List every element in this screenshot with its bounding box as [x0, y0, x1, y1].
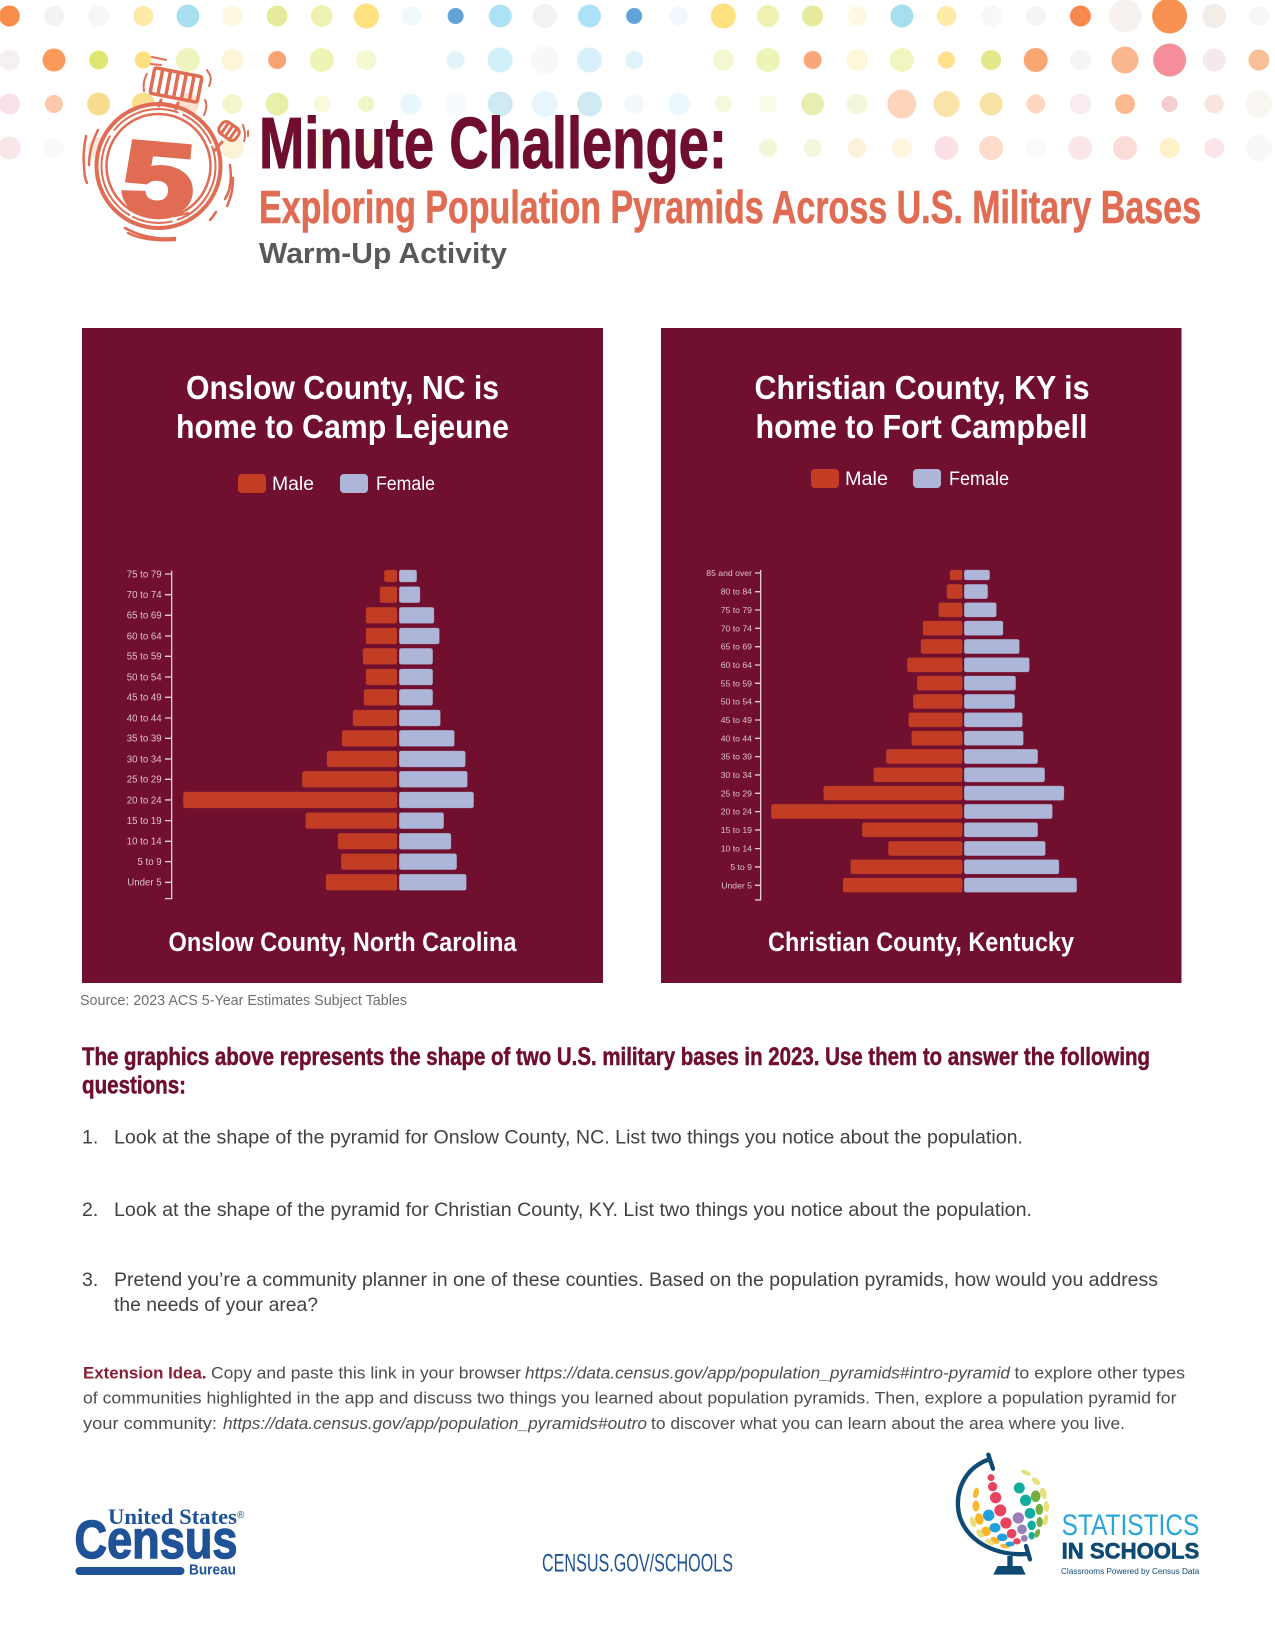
- icon: stopwatch with number 5: [84, 57, 248, 240]
- age labels: 30 to 34: [127, 754, 162, 765]
- chart: Onslow population pyramid: [127, 569, 474, 899]
- age labels: 75 to 79: [721, 605, 752, 615]
- age labels: 65 to 69: [721, 642, 752, 652]
- question 2: Look at the shape of the pyramid for Christian County, KY. List two things you notice about the population.: [114, 1199, 1032, 1221]
- panel heading: Fort Campbell: home to Fort Campbell: [756, 408, 1088, 445]
- age labels: 50 to 54: [127, 672, 162, 683]
- age labels: 5 to 9: [137, 857, 162, 868]
- warm-up heading: Warm-Up Activity: [259, 238, 507, 270]
- age labels: 85 and over: [706, 568, 752, 578]
- header dot pattern: [0, 0, 1272, 162]
- legend: Christian: [811, 469, 1009, 490]
- age labels: 60 to 64: [127, 631, 162, 642]
- female bars: [399, 570, 474, 890]
- question 3: [82, 1269, 1158, 1316]
- age labels: 60 to 64: [721, 660, 752, 670]
- age labels: 65 to 69: [127, 611, 162, 622]
- age labels: 30 to 34: [721, 770, 752, 780]
- question 3: the needs of your area?: [114, 1294, 318, 1316]
- age labels: 45 to 49: [127, 693, 162, 704]
- age labels: 25 to 29: [721, 788, 752, 798]
- age labels: 70 to 74: [721, 623, 752, 633]
- legend: Christian: Female: [949, 469, 1009, 490]
- extension idea: https://data.census.gov/app/population_pyramids#outro: [223, 1414, 647, 1433]
- panel heading: Fort Campbell: Christian County, KY is: [754, 369, 1090, 406]
- age labels: 40 to 44: [127, 713, 162, 724]
- age labels: 10 to 14: [127, 837, 162, 848]
- extension idea: your community:: [83, 1414, 217, 1433]
- age labels: 70 to 74: [127, 590, 162, 601]
- age labels: 15 to 19: [127, 816, 162, 827]
- website link: CENSUS.GOV/SCHOOLS: [542, 1550, 733, 1578]
- legend: Onslow: Male: [272, 474, 314, 495]
- extension idea: of communities highlighted in the app and discuss two things you learned about population pyramids. Then, explore a population pyramid for: [83, 1388, 1177, 1408]
- male bars: [183, 570, 397, 890]
- logo wordmark: IN SCHOOLS: [1062, 1538, 1199, 1563]
- age labels: 40 to 44: [721, 733, 752, 743]
- panel heading: Camp Lejeune: Onslow County, NC is: [186, 369, 499, 406]
- question 2: 2.: [82, 1199, 98, 1221]
- title: Minute Challenge:: [259, 104, 727, 184]
- question 1: Look at the shape of the pyramid for Onslow County, NC. List two things you notice about the population.: [114, 1126, 1023, 1148]
- age labels: Under 5: [127, 878, 162, 889]
- panel heading: Camp Lejeune: home to Camp Lejeune: [176, 408, 509, 445]
- legend: Onslow: Female: [376, 474, 435, 495]
- panel heading: Camp Lejeune: [176, 369, 509, 445]
- age labels: 35 to 39: [721, 752, 752, 762]
- question 3: 3.: [82, 1269, 98, 1291]
- extension idea: Copy and paste this link in your browser: [211, 1364, 521, 1382]
- extension idea: https://data.census.gov/app/population_pyramids#intro-pyramid: [525, 1364, 1011, 1382]
- age labels: 25 to 29: [127, 775, 162, 786]
- questions heading: questions:: [82, 1072, 186, 1100]
- age labels: 10 to 14: [721, 844, 752, 854]
- extension idea: Extension Idea.: [83, 1364, 206, 1382]
- logo: Statistics in Schools: [958, 1455, 1200, 1576]
- age labels: 55 to 59: [721, 678, 752, 688]
- extension idea: [83, 1364, 1185, 1433]
- age labels: 5 to 9: [730, 862, 752, 872]
- age labels: 20 to 24: [127, 795, 162, 806]
- age labels: 50 to 54: [721, 697, 752, 707]
- source note: Source: 2023 ACS 5-Year Estimates Subject Tables: [80, 992, 407, 1009]
- panel heading: Fort Campbell: [754, 369, 1090, 445]
- panel: Christian County: [661, 328, 1182, 983]
- logo wordmark: [1061, 1509, 1200, 1576]
- logo: United States Census Bureau: ®: [237, 1510, 245, 1521]
- logo: United States Census Bureau: Bureau: [189, 1562, 236, 1578]
- extension idea: to discover what you can learn about the area where you live.: [651, 1414, 1125, 1433]
- chart: Christian population pyramid: [706, 568, 1077, 900]
- male bars: [771, 570, 962, 892]
- questions heading: [82, 1043, 1150, 1100]
- panel: Onslow County: [82, 328, 603, 983]
- chart caption: Onslow: Onslow County, North Carolina: [168, 927, 517, 957]
- logo: United States Census Bureau: United States: [108, 1504, 237, 1529]
- logo wordmark: STATISTICS: [1062, 1509, 1199, 1542]
- number 5: 5: [117, 120, 199, 238]
- age labels: 20 to 24: [721, 807, 752, 817]
- age labels: 80 to 84: [721, 587, 752, 597]
- extension idea: to explore other types: [1014, 1364, 1185, 1382]
- legend: Onslow: [238, 474, 435, 495]
- age labels: Under 5: [721, 880, 752, 890]
- legend: Christian: Male: [845, 469, 888, 490]
- age labels: 75 to 79: [127, 569, 162, 580]
- logo: United States Census Bureau: Census: [74, 1510, 238, 1570]
- female bars: [964, 570, 1077, 892]
- age labels: 15 to 19: [721, 825, 752, 835]
- age labels: [127, 569, 162, 889]
- age labels: 35 to 39: [127, 734, 162, 745]
- question 3: Pretend you’re a community planner in one of these counties. Based on the population pyramids, how would you address: [114, 1269, 1158, 1291]
- icon: globe: [958, 1455, 1049, 1575]
- chart caption: Christian: Christian County, Kentucky: [768, 927, 1074, 957]
- age labels: 45 to 49: [721, 715, 752, 725]
- question 1: 1.: [82, 1126, 98, 1148]
- age labels: [706, 568, 752, 890]
- logo wordmark: Classrooms Powered by Census Data: [1061, 1567, 1200, 1576]
- age labels: 55 to 59: [127, 652, 162, 663]
